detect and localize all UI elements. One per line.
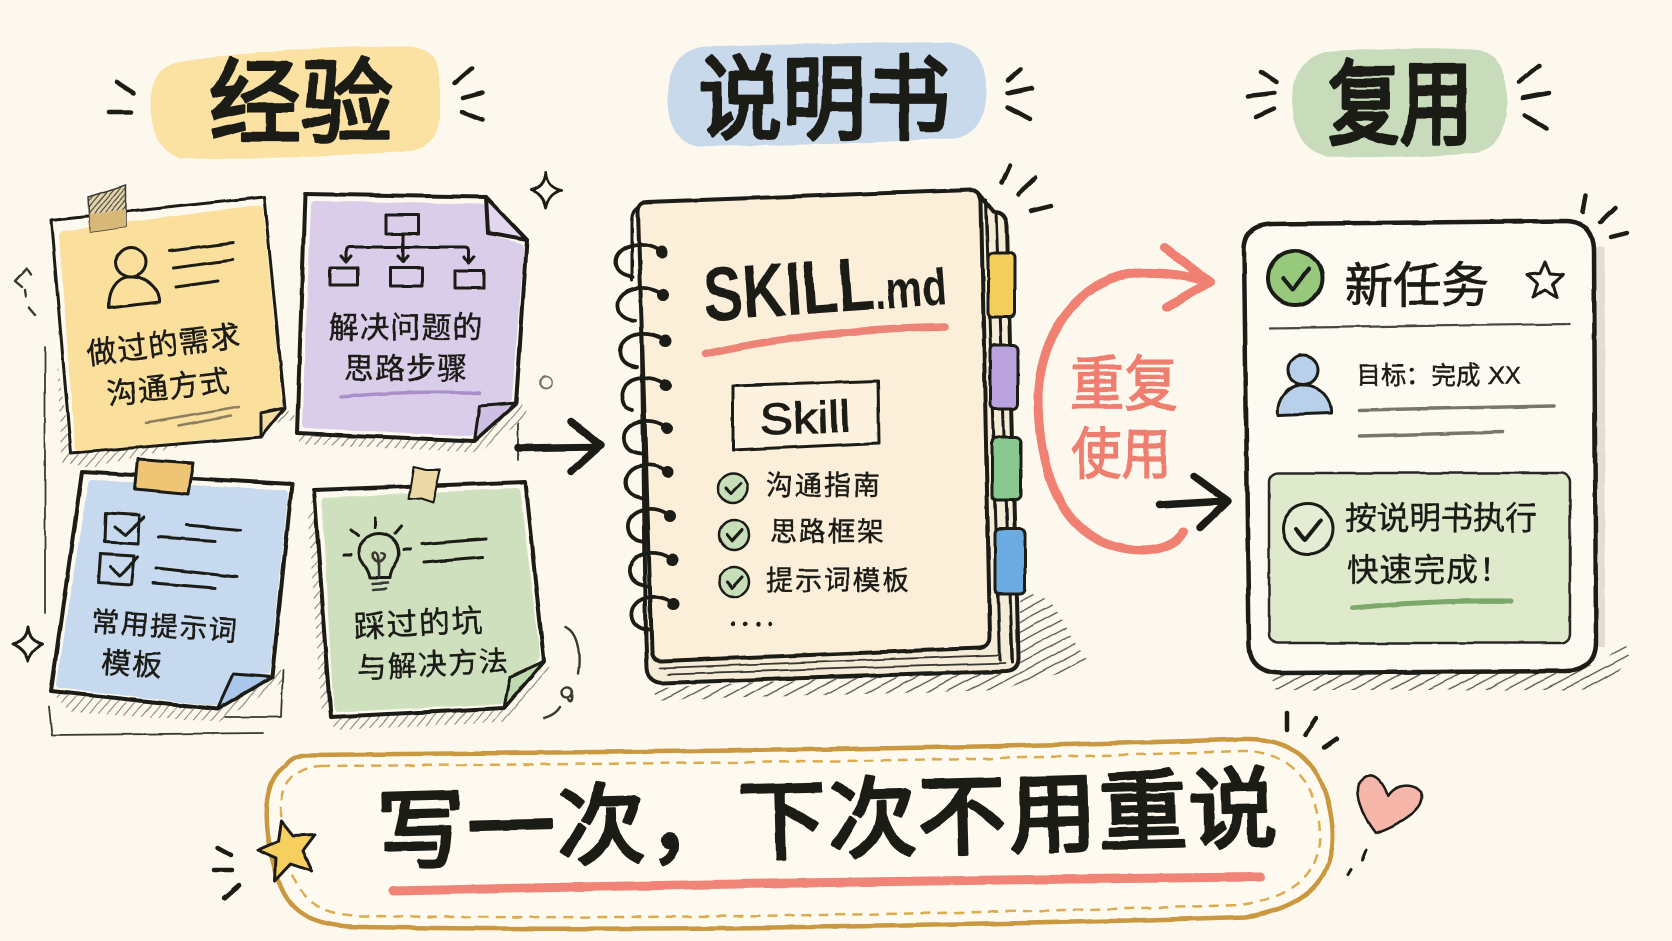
sticky note: experience of requirements communication — [51, 185, 298, 468]
note text: 沟通方式 — [105, 365, 232, 412]
spark marks — [1583, 196, 1627, 237]
red underline — [705, 327, 945, 354]
small circle — [540, 376, 552, 388]
note text: 做过的需求 — [85, 320, 243, 371]
page curl — [217, 674, 272, 709]
item: thinking framework: 思路框架 — [770, 517, 886, 547]
icon: sparkle left — [13, 627, 43, 661]
heading: 复用 — [1248, 48, 1549, 158]
header: new task — [1268, 251, 1563, 313]
page curl — [261, 408, 285, 437]
item: thinking framework — [719, 517, 886, 550]
spiral binding — [616, 245, 679, 630]
item: communication guide: 沟通指南 — [766, 471, 882, 501]
underline strokes — [146, 407, 239, 426]
slogan banner — [214, 713, 1422, 929]
result box — [1269, 473, 1570, 643]
icon: flow chart — [330, 215, 484, 288]
note text: 思路步骤 — [344, 353, 468, 386]
label box: Skill — [733, 381, 879, 450]
folded corner — [486, 197, 527, 240]
sticky note: common prompt templates — [51, 459, 292, 722]
note text: 踩过的坑 — [353, 603, 485, 645]
label box: Skill: Skill — [759, 392, 851, 445]
label: 重复使用: 重复 — [1070, 351, 1178, 419]
icon: star — [1527, 262, 1563, 297]
spark marks left — [214, 848, 239, 898]
page curl — [474, 403, 516, 441]
note text — [353, 602, 510, 686]
item: prompt templates: 提示词模板 — [766, 566, 911, 596]
icon: person — [109, 247, 159, 308]
sticky note: pitfalls and solutions — [308, 467, 552, 730]
spark marks below heart — [1348, 850, 1366, 875]
red underline — [393, 877, 1261, 891]
icon: light bulb — [344, 518, 411, 590]
index tabs — [988, 253, 1025, 594]
text lines — [170, 243, 233, 287]
underline stroke — [341, 392, 480, 397]
item: communication guide — [718, 471, 882, 503]
banner outline — [266, 739, 1333, 929]
note text: 与解决方法 — [356, 645, 510, 686]
heading: 经验 — [109, 46, 482, 159]
heading: 说明书: 说明书 — [698, 48, 950, 152]
tape — [135, 459, 193, 494]
result box: 快速完成！ — [1347, 552, 1512, 588]
note text: 解决问题的 — [328, 312, 484, 345]
decorative sketch marks around the notes — [13, 172, 579, 735]
label: 重复使用: 使用 — [1071, 424, 1171, 487]
note text: 模板 — [100, 647, 164, 684]
icon: heart — [1358, 776, 1422, 833]
title: SKILL.md: SKILL.md — [700, 236, 949, 338]
icon: checkboxes — [99, 513, 144, 585]
goal row: 目标：完成 XX — [1356, 362, 1522, 390]
hatch shadow — [1270, 640, 1630, 690]
card body — [1244, 221, 1596, 673]
arrow: repeat loop — [1038, 248, 1210, 550]
result box: 按说明书执行 — [1345, 500, 1537, 536]
arrow: notes to notebook — [518, 422, 601, 472]
heading: 经验: 经验 — [209, 53, 393, 155]
header: new task: 新任务 — [1345, 260, 1489, 313]
text lines — [422, 539, 486, 562]
ellipsis dots — [731, 622, 772, 626]
page curl — [504, 661, 544, 708]
note text — [328, 312, 484, 386]
note text: 常用提示词 — [90, 606, 239, 647]
slogan text: 写一次，下次不用重说 — [376, 759, 1278, 882]
heading: 说明书 — [668, 43, 1032, 152]
label: 重复使用 — [1070, 351, 1178, 487]
checklist — [718, 471, 911, 626]
tape: hatched — [88, 185, 126, 232]
heading: 复用: 复用 — [1328, 53, 1472, 157]
icon: sparkle top — [531, 172, 561, 208]
text lines — [153, 525, 241, 588]
back cover and pages — [632, 195, 1018, 683]
goal row — [1278, 355, 1554, 436]
hatch shadow — [650, 590, 1090, 700]
tape — [409, 467, 440, 502]
front page — [638, 190, 990, 661]
spark marks top right — [1287, 713, 1337, 748]
arrow: notebook to task card — [1159, 476, 1228, 528]
icon: star — [258, 821, 315, 881]
note text — [87, 606, 239, 689]
note text — [85, 320, 248, 414]
notebook: SKILL.md — [616, 165, 1090, 700]
spark marks — [1002, 165, 1051, 211]
task card — [1244, 196, 1630, 690]
sticky note: problem solving steps — [297, 194, 530, 452]
